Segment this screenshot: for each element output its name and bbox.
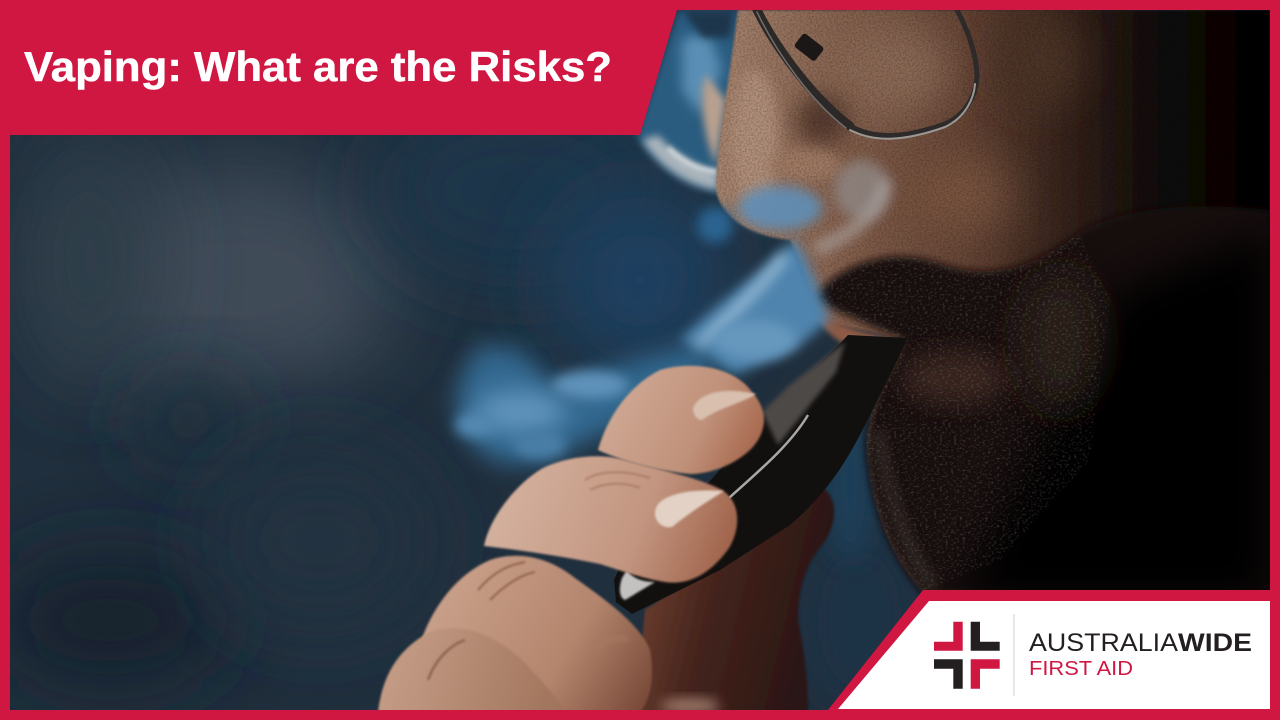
little finger [378, 628, 565, 712]
cheek and nose highlights [820, 25, 950, 115]
index finger [598, 366, 764, 474]
lip [820, 318, 897, 344]
skin pores [716, 10, 1119, 338]
logo wordmark [1029, 629, 1252, 680]
index fingernail [693, 391, 756, 420]
beard [812, 206, 1270, 600]
logo wordmark: FIRST AID [1029, 658, 1133, 680]
blurred glasses lens, far side [636, 10, 740, 192]
title: Vaping: What are the Risks? [24, 43, 612, 90]
face [716, 10, 1270, 600]
ring finger [418, 556, 652, 712]
vape device [614, 335, 908, 614]
knuckle creases [585, 472, 650, 490]
logo mark: four-part cross [934, 622, 1000, 689]
hand [378, 366, 764, 714]
glasses frame [757, 10, 977, 139]
title banner [0, 0, 680, 135]
logo divider [1014, 614, 1015, 696]
logo wordmark: WIDE [1178, 629, 1252, 657]
vapour cloud [455, 160, 890, 464]
middle finger [484, 456, 737, 583]
palm shadow [635, 485, 834, 712]
logo wordmark: AUSTRALIA [1029, 629, 1178, 657]
middle fingernail [655, 490, 724, 527]
logo panel [820, 590, 1280, 720]
